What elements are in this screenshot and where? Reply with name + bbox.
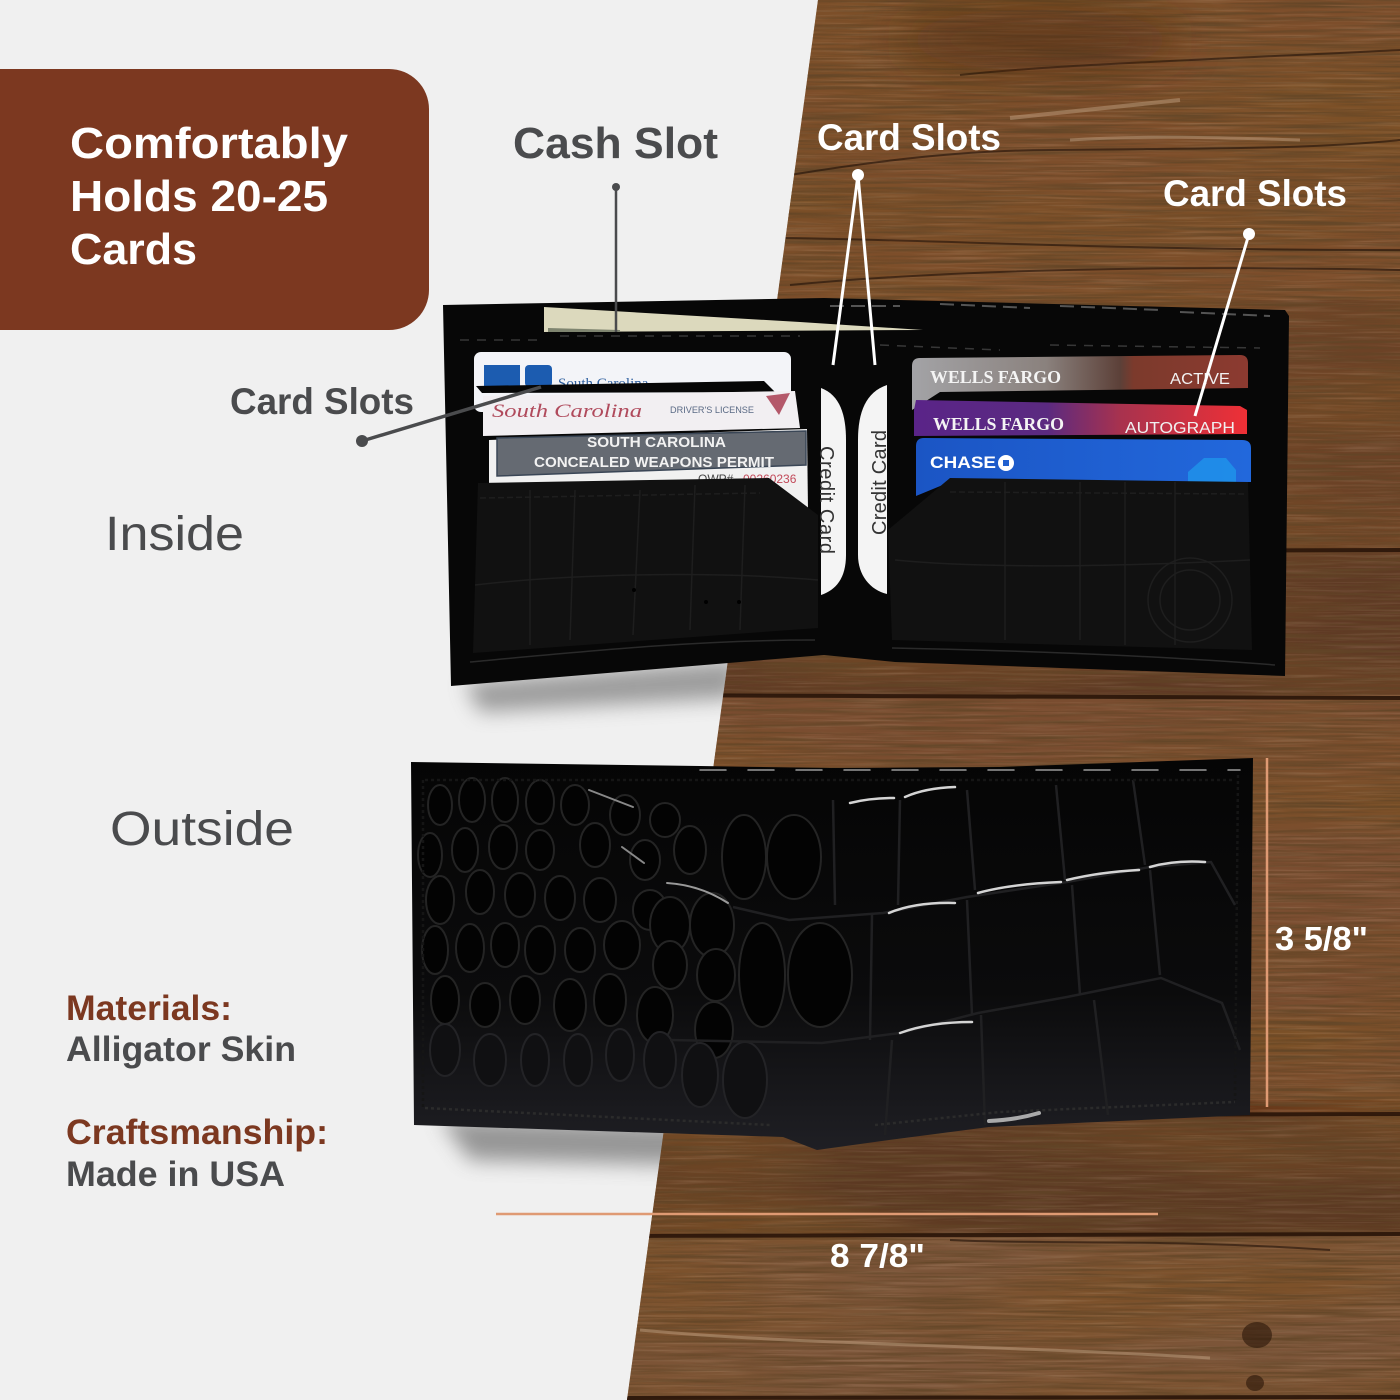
dimension: width: 8 7/8" — [830, 1237, 925, 1274]
text block: craftsmanship: Craftsmanship: — [66, 1113, 328, 1152]
center credit cards: Credit Card — [815, 446, 837, 554]
heading: card slots right: Card Slots — [1163, 173, 1347, 214]
arrow: cash slot leader — [612, 183, 620, 332]
heading: cash slot: Cash Slot — [513, 119, 718, 168]
text block: materials: Alligator Skin — [66, 1030, 296, 1069]
left cards: DRIVER'S LICENSE — [670, 405, 754, 416]
text block: materials — [66, 989, 296, 1069]
label: inside: Inside — [105, 508, 244, 561]
cash bill — [544, 307, 923, 332]
text block: craftsmanship — [66, 1113, 328, 1194]
heading: card slots center: Card Slots — [817, 117, 1001, 158]
left cards: South Carolina — [558, 376, 649, 392]
small scales — [418, 778, 852, 1058]
right cards: ACTIVE — [1170, 371, 1230, 388]
left cards: 00260236 — [743, 472, 797, 486]
right cards: WELLS FARGO — [930, 367, 1061, 387]
right cards: WELLS FARGO — [933, 414, 1064, 434]
title badge: Cards — [70, 225, 197, 274]
right cards: CHASE — [930, 453, 996, 472]
label: outside: Outside — [110, 803, 294, 856]
title badge: Holds 20-25 — [70, 172, 328, 221]
heading: card slots left: Card Slots — [230, 381, 414, 422]
left cards: South Carolina — [492, 401, 642, 422]
left pocket — [470, 478, 818, 662]
title badge — [0, 69, 429, 330]
arrow: right card slots leader — [1195, 228, 1255, 416]
wallet outside — [411, 758, 1253, 1165]
wallet inside — [443, 298, 1289, 712]
text block: craftsmanship: Made in USA — [66, 1155, 285, 1194]
left cards: CONCEALED WEAPONS PERMIT — [534, 455, 774, 471]
right cards: AUTOGRAPH — [1125, 420, 1235, 437]
left cards: OWP# — [698, 472, 734, 486]
dimension: height: 3 5/8" — [1275, 920, 1368, 957]
right cards — [912, 355, 1251, 496]
center credit cards — [815, 385, 891, 595]
left cards: SOUTH CAROLINA — [587, 435, 727, 451]
right pocket — [888, 478, 1275, 665]
arrow: center card slots leader — [833, 169, 875, 365]
title badge: Comfortably — [70, 119, 349, 168]
left cards — [474, 352, 808, 510]
wood background panel — [600, 0, 1400, 1400]
big scales and ridges — [423, 775, 1240, 1135]
lower scales — [430, 1024, 767, 1118]
center credit cards: Credit Card — [869, 430, 891, 535]
text block: materials: Materials: — [66, 989, 232, 1028]
arrow: left card slots leader — [356, 387, 541, 447]
glossy highlights — [589, 770, 1240, 1121]
wallet inside stitching and glints — [460, 304, 1270, 350]
